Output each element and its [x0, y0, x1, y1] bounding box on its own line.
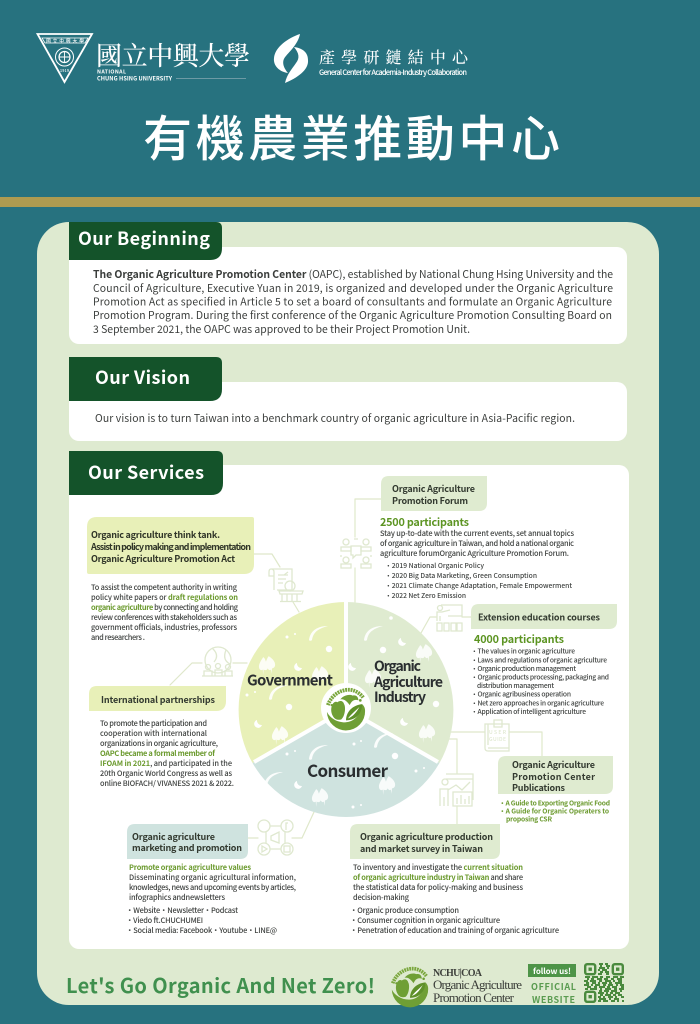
heading: our beginning: Our Beginning: [78, 225, 210, 251]
list: course topics: ・Laws and regulations of organic agriculture: [471, 654, 607, 664]
official website label: OFFICIAL: [531, 980, 576, 993]
footer: [66, 964, 624, 1007]
text: survey description: of organic agriculture industry in Taiwan and share: [353, 872, 523, 883]
icon: QR code: [584, 964, 624, 1002]
callout: marketing and promotion: marketing and promotion: [132, 841, 242, 854]
list: marketing channels: ・Viedo ft.CHUCHUMEI: [126, 915, 203, 926]
university name: 國立中興大學: [96, 36, 250, 73]
callout: think tank: Organic agriculture think tank.: [91, 528, 220, 541]
official website label: WEBSITE: [532, 993, 575, 1006]
icon: centre organic logo: [321, 683, 371, 733]
icon: user guide book: USER: [489, 729, 507, 736]
stat: 4000 participants: 4000 participants: [474, 631, 564, 647]
icon: university triangular emblem: 國立中興大學: [46, 38, 84, 44]
text: think tank description: To assist the competent authority in writing: [91, 582, 238, 593]
callout: promotion forum: [381, 476, 487, 511]
callout: extension education: Extension education courses: [478, 610, 601, 624]
block: publications: [485, 720, 613, 824]
callout: marketing and promotion: Organic agriculture: [132, 830, 215, 843]
title: 有機農業推動中心: [143, 100, 560, 171]
text: beginning paragraph: [93, 266, 613, 336]
header logos: [38, 34, 469, 83]
main panel: [37, 222, 659, 1007]
block: think tank: [87, 517, 303, 643]
text: marketing description: infographics andnewsletters: [129, 892, 225, 903]
text: partnerships description: 20th Organic World Congress as well as: [100, 768, 232, 779]
text: partnerships description: [100, 718, 234, 789]
academia-industry centre name: General Center for Academia-Industry Collaboration: [319, 67, 467, 78]
slogan: Let's Go Organic And Net Zero!: [66, 970, 375, 999]
heading: our services: Our Services: [88, 459, 204, 485]
text: partnerships description: cooperation with international: [100, 728, 207, 739]
icon: market analyst: [440, 774, 473, 806]
list: course topics: ・The values in organic agriculture: [471, 646, 575, 656]
block: marketing and promotion: [126, 820, 296, 936]
block: market survey: [350, 774, 559, 936]
text: beginning paragraph: Promotion Program. During the first conference of the Organic Agriculture Promotion Consulting Board on: [93, 307, 612, 322]
list: course topics: ・Application of intelligent agriculture: [471, 706, 586, 716]
list: survey topics: ・Penetration of education and training of organic agriculture: [350, 925, 559, 936]
gold divider band: [0, 197, 700, 207]
callout: publications: Organic Agriculture: [512, 758, 595, 771]
text: beginning paragraph: Promotion Act as specified in Article 5 to set a board of consultants and formulate an Organic Agriculture: [93, 294, 612, 308]
list: course topics: distribution management: [477, 680, 554, 690]
label: government: Government: [247, 670, 334, 690]
stat: 2500 participants: 2500 participants: [380, 514, 469, 530]
list: course topics: ・Net zero approaches in organic agriculture: [471, 698, 604, 708]
text: marketing description: Disseminating organic agricultural information,: [129, 872, 296, 883]
list: publication titles: [499, 798, 610, 824]
icon: university triangular emblem: 1919: [60, 69, 69, 74]
sector: government: [239, 602, 346, 763]
organisation name: Organic Agriculture: [433, 977, 522, 992]
list: survey topics: [350, 905, 559, 936]
list: course topics: [471, 646, 609, 716]
callout: international partnerships: [89, 686, 226, 711]
text: partnerships description: IFOAM in 2021, and participated in the: [100, 758, 232, 769]
list: marketing channels: ・Website・Newsletter・Podcast: [126, 905, 238, 916]
callout: extension education: [471, 604, 617, 629]
list: marketing channels: ・Social media: Facebook・Youtube・LINE@: [126, 925, 277, 936]
icon: user guide book: [485, 720, 509, 751]
callout: international partnerships: International partnerships: [101, 693, 216, 706]
academia-industry centre name: [319, 45, 469, 78]
heading: our vision: [69, 357, 222, 401]
icon: document and government building: [269, 569, 303, 602]
list: forum topics: ・2021 Climate Change Adaptation, Female Empowerment: [385, 580, 572, 590]
official website label: [531, 980, 576, 1006]
text: think tank description: government officials, industries, professors: [91, 622, 237, 633]
text: survey description: decision-making: [353, 892, 410, 903]
icon: academia-industry swirl logo: [274, 34, 308, 83]
icon: organisation logo: [392, 969, 428, 1007]
badge: follow us: [528, 964, 576, 977]
text: think tank description: [91, 582, 239, 643]
text: think tank description: policy white papers or draft regulations on: [91, 592, 238, 603]
label: organic agriculture industry: Agriculture: [373, 672, 443, 692]
organisation name: NCHU|COA: [433, 968, 483, 979]
pie chart: three service sectors: [239, 600, 453, 817]
list: course topics: ・Organic agribusiness operation: [471, 688, 571, 698]
icon: university triangular emblem: [38, 34, 92, 82]
callout: marketing and promotion: [127, 824, 248, 859]
list: forum topics: ・2020 Big Data Marketing, Green Consumption: [385, 570, 537, 580]
badge: follow us: follow us!: [533, 966, 571, 977]
callout: publications: [498, 756, 613, 794]
heading: our services: [69, 451, 223, 495]
heading: our beginning: [69, 222, 222, 260]
callout: think tank: Assist in policy making and implementation: [90, 540, 251, 553]
list: forum topics: ・2022 Net Zero Emission: [385, 590, 466, 600]
text: marketing description: knowledges, news and upcoming events by articles,: [129, 882, 296, 893]
list: forum topics: [385, 560, 572, 600]
text: forum description: Stay up-to-date with the current events, set annual topics: [380, 528, 574, 539]
text: forum description: [380, 528, 574, 559]
callout: promotion forum: Promotion Forum: [392, 494, 468, 507]
block: international partnerships: [89, 647, 234, 789]
text: survey description: [353, 862, 523, 903]
block: extension education: [437, 604, 617, 716]
university name: NATIONAL: [97, 68, 126, 76]
connector lines: [170, 499, 542, 838]
icon: forum people: [341, 539, 371, 568]
text: beginning paragraph: The Organic Agriculture Promotion Center (OAPC), established by National Chung Hsing University and the: [93, 266, 613, 281]
icon: classroom: [437, 605, 462, 631]
text: think tank description: organic agriculture by connecting and holding: [91, 602, 239, 613]
list: survey topics: ・Organic produce consumption: [350, 905, 459, 916]
text: partnerships description: OAPC became a formal member of: [100, 748, 215, 759]
text: forum description: of organic agriculture in Taiwan, and hold a national organic: [380, 538, 574, 549]
sector: organic agriculture industry: [346, 602, 453, 763]
callout: promotion forum: Organic Agriculture: [392, 482, 475, 495]
list: marketing channels: [126, 905, 277, 936]
section: our beginning: [69, 222, 627, 344]
text: think tank description: and researchers .: [91, 632, 145, 643]
list: course topics: ・Organic production management: [471, 663, 576, 673]
icon: social media: [258, 820, 293, 855]
list: publication titles: proposing CSR: [506, 814, 552, 824]
label: organic agriculture industry: Industry: [374, 687, 426, 707]
list: survey topics: ・Consumer cognition in organic agriculture: [350, 915, 500, 926]
organisation name: Promotion Center: [433, 990, 515, 1005]
organisation name: [433, 968, 522, 1005]
callout: market survey: and market survey in Taiwan: [360, 842, 483, 855]
text: survey description: To inventory and investigate the current situation: [353, 862, 523, 873]
text: beginning paragraph: 3 September 2021, the OAPC was approved to be their Project Promotion Unit.: [93, 321, 470, 336]
label: consumer: Consumer: [307, 757, 389, 782]
text: vision statement: Our vision is to turn Taiwan into a benchmark country of organic agriculture in Asia-Pacific region.: [95, 410, 575, 425]
text: partnerships description: online BIOFACH/ VIVANESS 2021 & 2022.: [100, 778, 234, 789]
callout: think tank: Organic Agriculture Promotion Act: [91, 552, 235, 565]
section: our services: [69, 451, 629, 949]
text: marketing description: Promote organic agriculture values: [129, 862, 251, 873]
list: publication titles: ・A Guide for Organic Operaters to: [499, 806, 609, 816]
callout: market survey: [350, 824, 500, 859]
label: organic agriculture industry: [373, 656, 443, 707]
text: beginning paragraph: Council of Agriculture, Executive Yuan in 2019, is organized and developed under the Organic Agriculture: [93, 280, 613, 295]
list: course topics: ・Organic products processing, packaging and: [471, 672, 609, 682]
icon: user guide book: GUIDE: [489, 736, 506, 743]
heading: our vision: Our Vision: [95, 364, 190, 390]
callout: publications: Publications: [512, 781, 566, 794]
text: partnerships description: organizations in organic agriculture,: [100, 738, 218, 749]
text: survey description: the statistical data for policy-making and business: [353, 882, 523, 893]
text: forum description: agriculture forumOrganic Agriculture Promotion Forum.: [380, 548, 569, 559]
sector: consumer: [252, 709, 440, 817]
university name: CHUNG HSING UNIVERSITY: [97, 74, 173, 82]
text: think tank description: review conferences with stakeholders such as: [91, 612, 237, 623]
text: partnerships description: To promote the participation and: [100, 718, 207, 729]
callout: think tank: [87, 517, 254, 574]
icon: globe and people: [202, 647, 233, 676]
callout: market survey: Organic agriculture production: [360, 830, 493, 843]
list: forum topics: ・2019 National Organic Policy: [385, 560, 484, 570]
block: promotion forum: [341, 476, 574, 600]
label: organic agriculture industry: Organic: [374, 656, 421, 676]
section: our vision: [69, 357, 627, 441]
callout: publications: Promotion Center: [512, 770, 595, 783]
academia-industry centre name: 產學研鏈結中心: [319, 45, 469, 68]
list: publication titles: ・A Guide to Exporting Organic Food: [499, 798, 610, 808]
text: marketing description: [129, 862, 296, 903]
